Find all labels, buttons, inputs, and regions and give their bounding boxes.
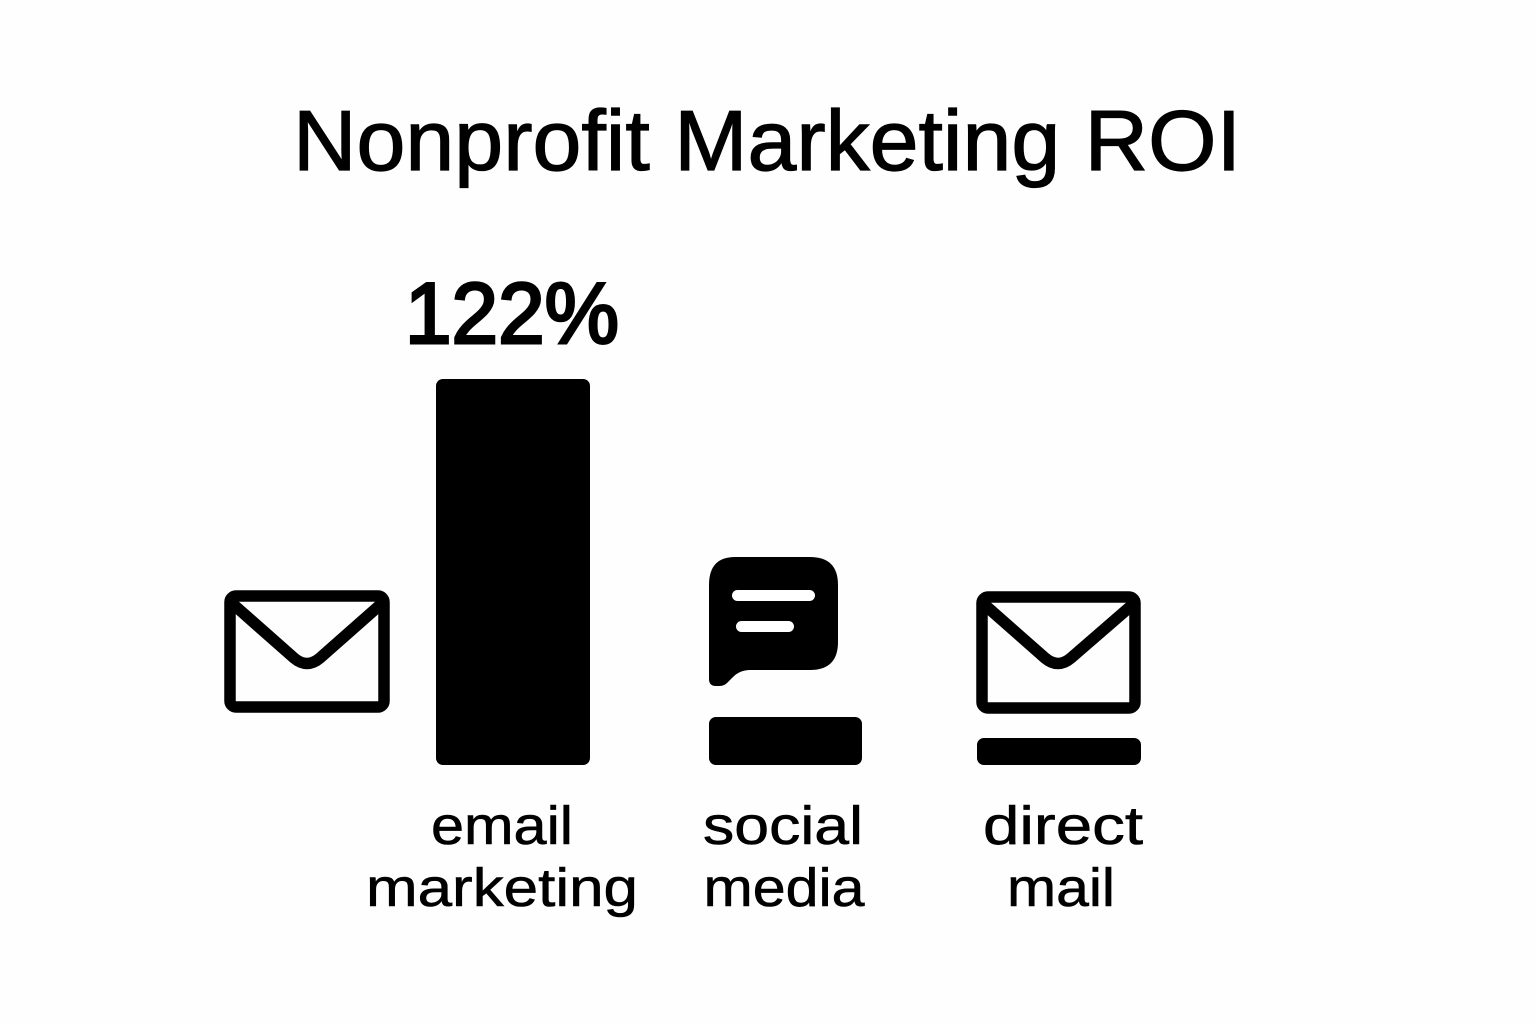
label: direct mail xyxy=(983,796,1143,918)
label: email marketing xyxy=(366,796,638,918)
value label: 122%: 122% xyxy=(405,266,619,362)
label: social media: media xyxy=(704,858,866,918)
icon: email envelope xyxy=(230,596,384,707)
bar: email marketing xyxy=(436,379,590,765)
label: email marketing: email xyxy=(431,796,573,856)
label: social media xyxy=(703,796,866,918)
label: direct mail: direct xyxy=(983,796,1143,856)
bar: social media xyxy=(709,717,862,765)
bar: direct mail xyxy=(977,738,1141,765)
label: social media: social xyxy=(703,796,863,856)
title: Nonprofit Marketing ROI xyxy=(293,94,1241,189)
icon: chat bubble xyxy=(709,557,838,686)
icon: direct mail envelope xyxy=(982,597,1135,708)
label: email marketing: marketing xyxy=(366,858,638,918)
label: direct mail: mail xyxy=(1007,858,1115,918)
